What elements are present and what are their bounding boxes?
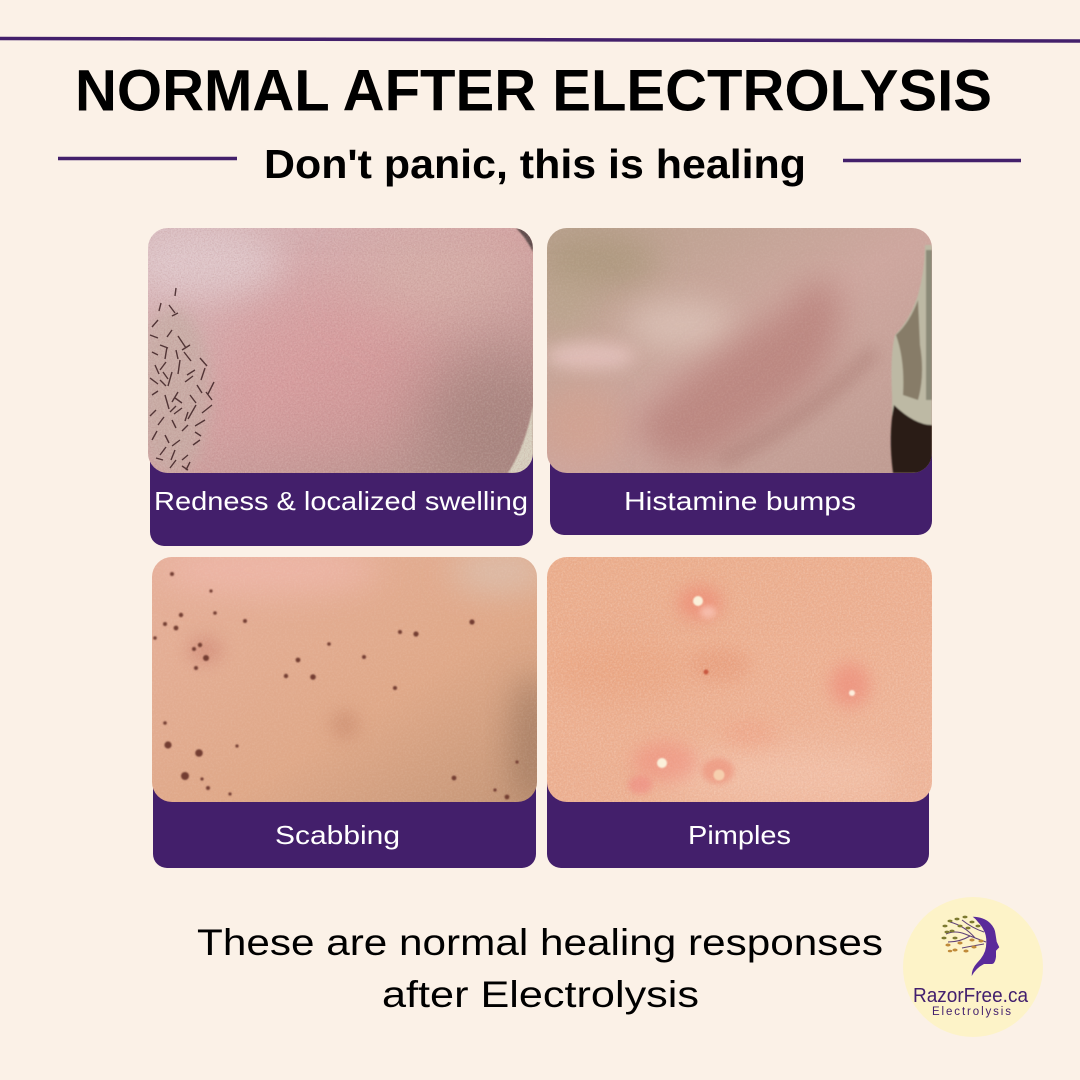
caption: scabbing: Scabbing — [275, 820, 400, 850]
caption: pimples: Pimples — [688, 820, 791, 850]
closing statement: after Electrolysis — [382, 974, 699, 1015]
panel: histamine bumps — [535, 228, 932, 535]
caption: redness: Redness & localized swelling — [154, 486, 528, 516]
photo: histamine bumps on jaw — [535, 228, 932, 473]
caption bar: scabbing — [153, 770, 536, 868]
caption bar: pimples — [547, 770, 929, 868]
icon: head silhouette with tree — [941, 916, 999, 976]
closing statement — [197, 922, 883, 1015]
logo: RazorFree.ca Electrolysis — [903, 897, 1043, 1037]
caption: histamine: Histamine bumps — [624, 486, 856, 516]
logo tagline: Electrolysis — [932, 1006, 1011, 1018]
subtitle with side rules: Don't panic, this is healing — [264, 141, 806, 187]
photo: pimples on skin — [547, 557, 932, 803]
caption bar: histamine — [550, 440, 932, 535]
panel: redness and localized swelling — [148, 228, 533, 546]
logo wordmark: RazorFree.ca — [913, 985, 1029, 1007]
photo: redness on skin — [148, 228, 533, 473]
closing statement: These are normal healing responses — [197, 922, 883, 963]
panel: scabbing — [152, 546, 555, 868]
photo: scabbing on skin — [152, 546, 555, 805]
title: NORMAL AFTER ELECTROLYSIS — [75, 58, 992, 124]
panel: pimples — [547, 557, 932, 868]
caption bar: redness — [150, 440, 533, 546]
